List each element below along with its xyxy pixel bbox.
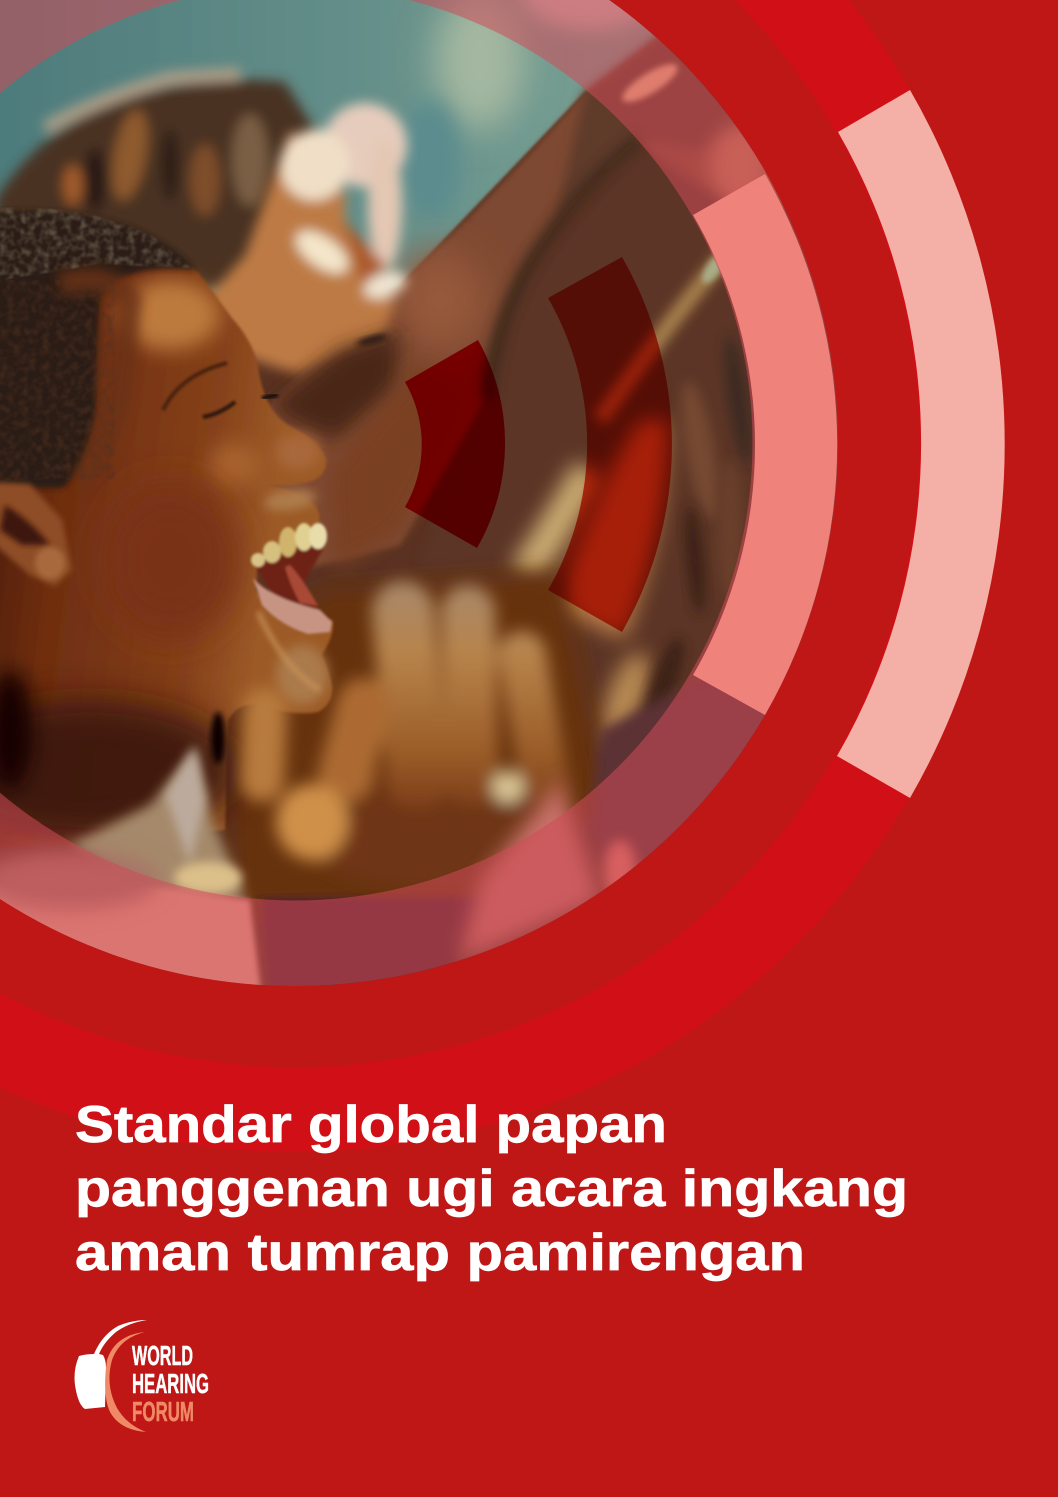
right dark crowd area [612,156,720,884]
man in background: face and raised hand [205,103,410,375]
icon: orange arc [105,1332,146,1432]
woman's open mouth and teeth [251,523,332,634]
logo wordmark [132,1340,209,1427]
title: Standar global papan [75,1096,667,1154]
woman's ear [0,482,72,586]
logo: World Hearing Forum [74,1320,209,1432]
title [75,1096,908,1282]
woman's chest and collarbone [70,750,246,900]
sound wave wedge: outer [548,257,672,632]
teal sky background [0,0,688,294]
logo wordmark: HEARING [132,1368,209,1399]
tinted ring over photo [0,0,838,986]
title: aman tumrap pamirengan [75,1224,805,1282]
logo wordmark: WORLD [132,1340,193,1371]
hands backdrop [225,570,610,910]
sound wave wedge: inner [405,340,505,548]
woman's eye and brow [163,363,227,410]
shadow behind woman's face [268,330,400,440]
icon: headphone ear cup and band [74,1320,147,1409]
logo wordmark: FORUM [132,1396,194,1427]
photo: cheering woman in crowd [0,0,880,1000]
ring gap: dark red band [0,0,919,1067]
salmon arc segment [693,174,837,715]
woman's face [0,256,333,850]
woman's hair [0,211,195,488]
skin and shirt beneath the photo window [0,886,264,985]
man in background: hair [0,74,315,290]
outer ring: bright red band [0,0,1004,1152]
light pink arc segment [837,90,1005,798]
clapping hands [262,612,565,890]
title: panggenan ugi acara ingkang [75,1160,908,1218]
raised arm [269,37,784,568]
